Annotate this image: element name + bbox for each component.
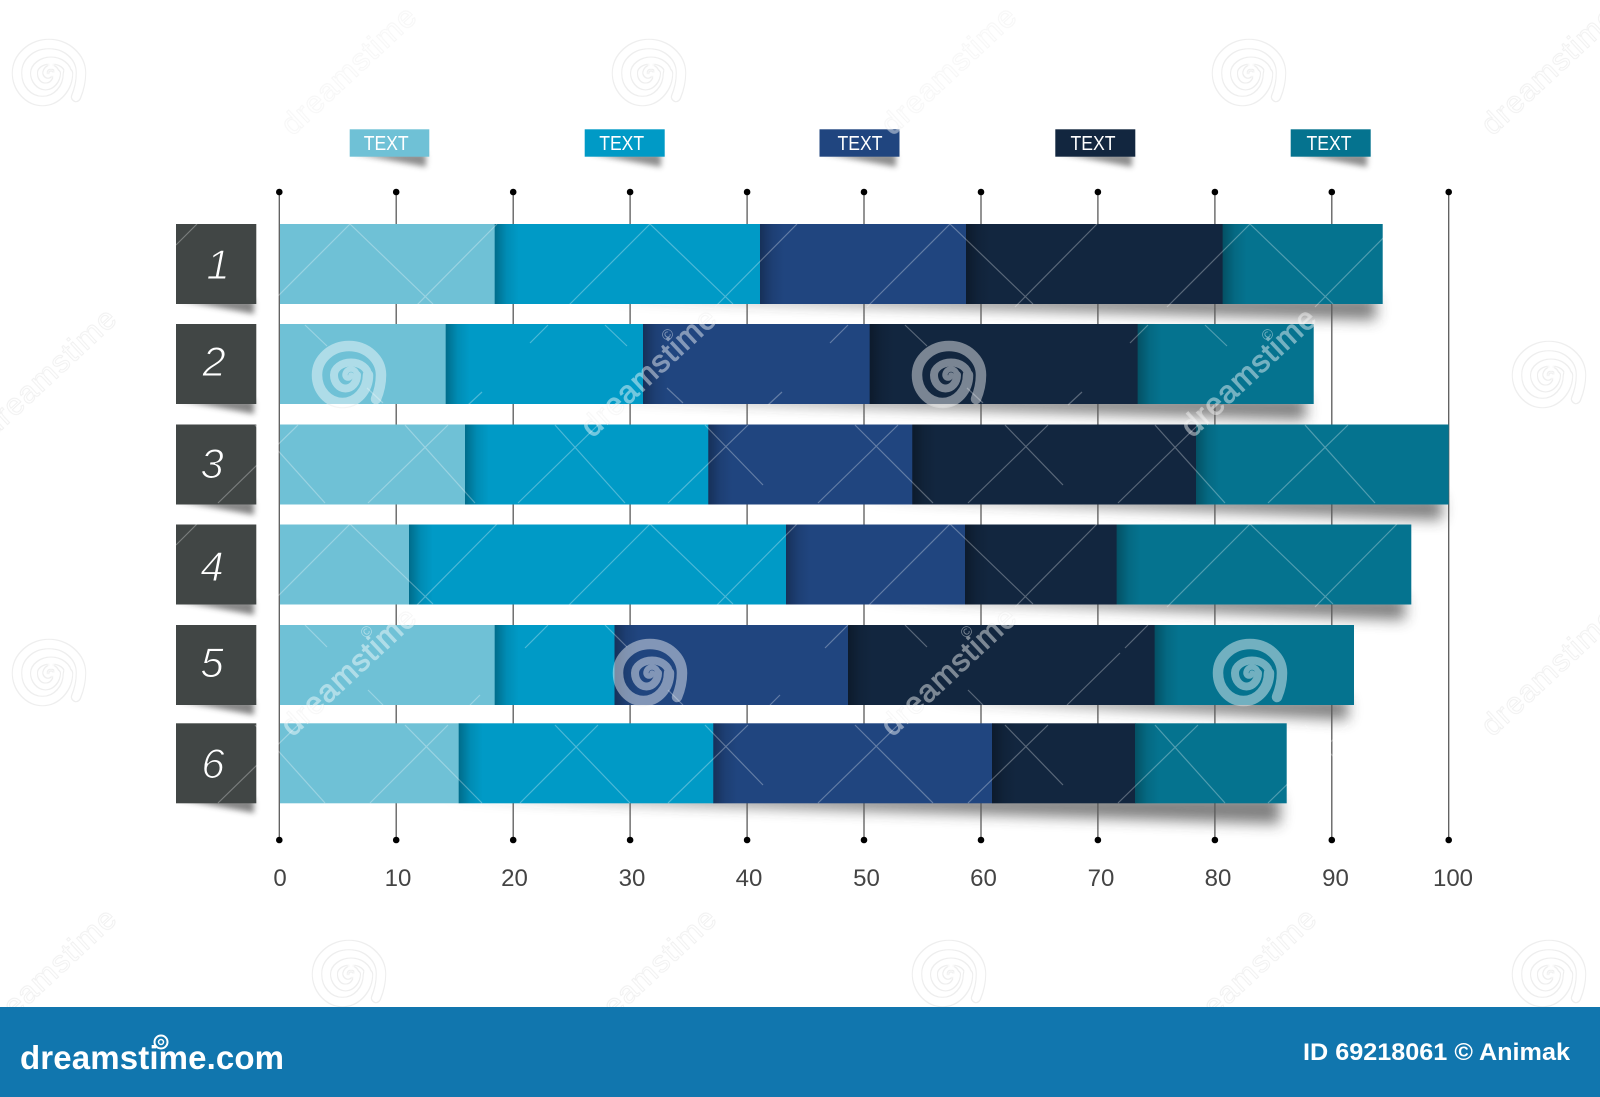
- x axis labels: [273, 865, 1473, 892]
- watermark overlay: [176, 0, 1397, 803]
- x axis labels: 20: [501, 865, 528, 892]
- row number boxes: [176, 224, 256, 813]
- x axis labels: 90: [1322, 865, 1349, 892]
- x axis labels: 70: [1088, 865, 1114, 892]
- watermark overlay: dreamstime: [873, 0, 1023, 142]
- row number boxes: 2: [201, 338, 226, 385]
- bar drop shadows: [440, 297, 1442, 824]
- x axis labels: 60: [970, 865, 997, 892]
- row number boxes: 1: [206, 241, 230, 288]
- watermark overlay: dreamstime: [1173, 301, 1323, 444]
- legend tags: [350, 129, 1371, 167]
- faint background watermark: dreamstime: [273, 0, 423, 142]
- bar row 4: [280, 524, 1411, 604]
- faint background watermark: dreamstime: [273, 600, 423, 743]
- legend tags: TEXT: [364, 133, 409, 155]
- faint background watermark: dreamstime: [1173, 301, 1323, 444]
- faint background watermark: dreamstime: [873, 0, 1023, 142]
- x axis labels: 50: [853, 865, 880, 892]
- watermark overlay: ©: [1258, 325, 1278, 345]
- legend tags: TEXT: [1306, 133, 1352, 155]
- watermark overlay: ©: [957, 622, 977, 642]
- footer bar: [0, 1007, 1600, 1097]
- x axis labels: 80: [1205, 865, 1231, 892]
- bar row 1: [280, 224, 1383, 304]
- watermark overlay: dreamstime: [873, 600, 1023, 743]
- row number boxes: 4: [200, 543, 224, 590]
- watermark overlay: dreamstime: [573, 301, 723, 444]
- watermark overlay: ©: [658, 325, 678, 345]
- x axis labels: 10: [385, 865, 411, 892]
- legend tags: TEXT: [1070, 133, 1116, 155]
- faint background watermark: dreamstime: [573, 901, 723, 1044]
- x axis labels: 30: [619, 865, 645, 892]
- footer logo: dreamstime.com: [20, 1039, 284, 1076]
- row number boxes: 6: [201, 740, 225, 787]
- bar row 2: [280, 324, 1314, 404]
- faint background watermark: dreamstime: [1173, 901, 1323, 1044]
- x axis labels: 100: [1433, 865, 1473, 892]
- watermark overlay: dreamstime: [273, 600, 423, 743]
- bar row 6: [280, 723, 1287, 803]
- row number boxes: 5: [200, 639, 224, 686]
- bar row 5: [280, 625, 1354, 705]
- bar row 3: [280, 424, 1449, 504]
- watermark overlay: ©: [357, 622, 377, 642]
- x axis labels: 40: [736, 865, 762, 892]
- watermark overlay: dreamstime: [273, 0, 423, 142]
- faint background watermark: dreamstime: [573, 301, 723, 444]
- row number boxes: 3: [200, 440, 224, 487]
- legend tags: TEXT: [838, 133, 882, 155]
- faint background watermark: dreamstime: [873, 600, 1023, 743]
- axis grid lines with end dots: [276, 189, 1452, 843]
- x axis labels: 0: [273, 865, 287, 892]
- image id and credit: ID 69218061 © Animak: [1303, 1039, 1571, 1066]
- legend tags: TEXT: [599, 133, 644, 155]
